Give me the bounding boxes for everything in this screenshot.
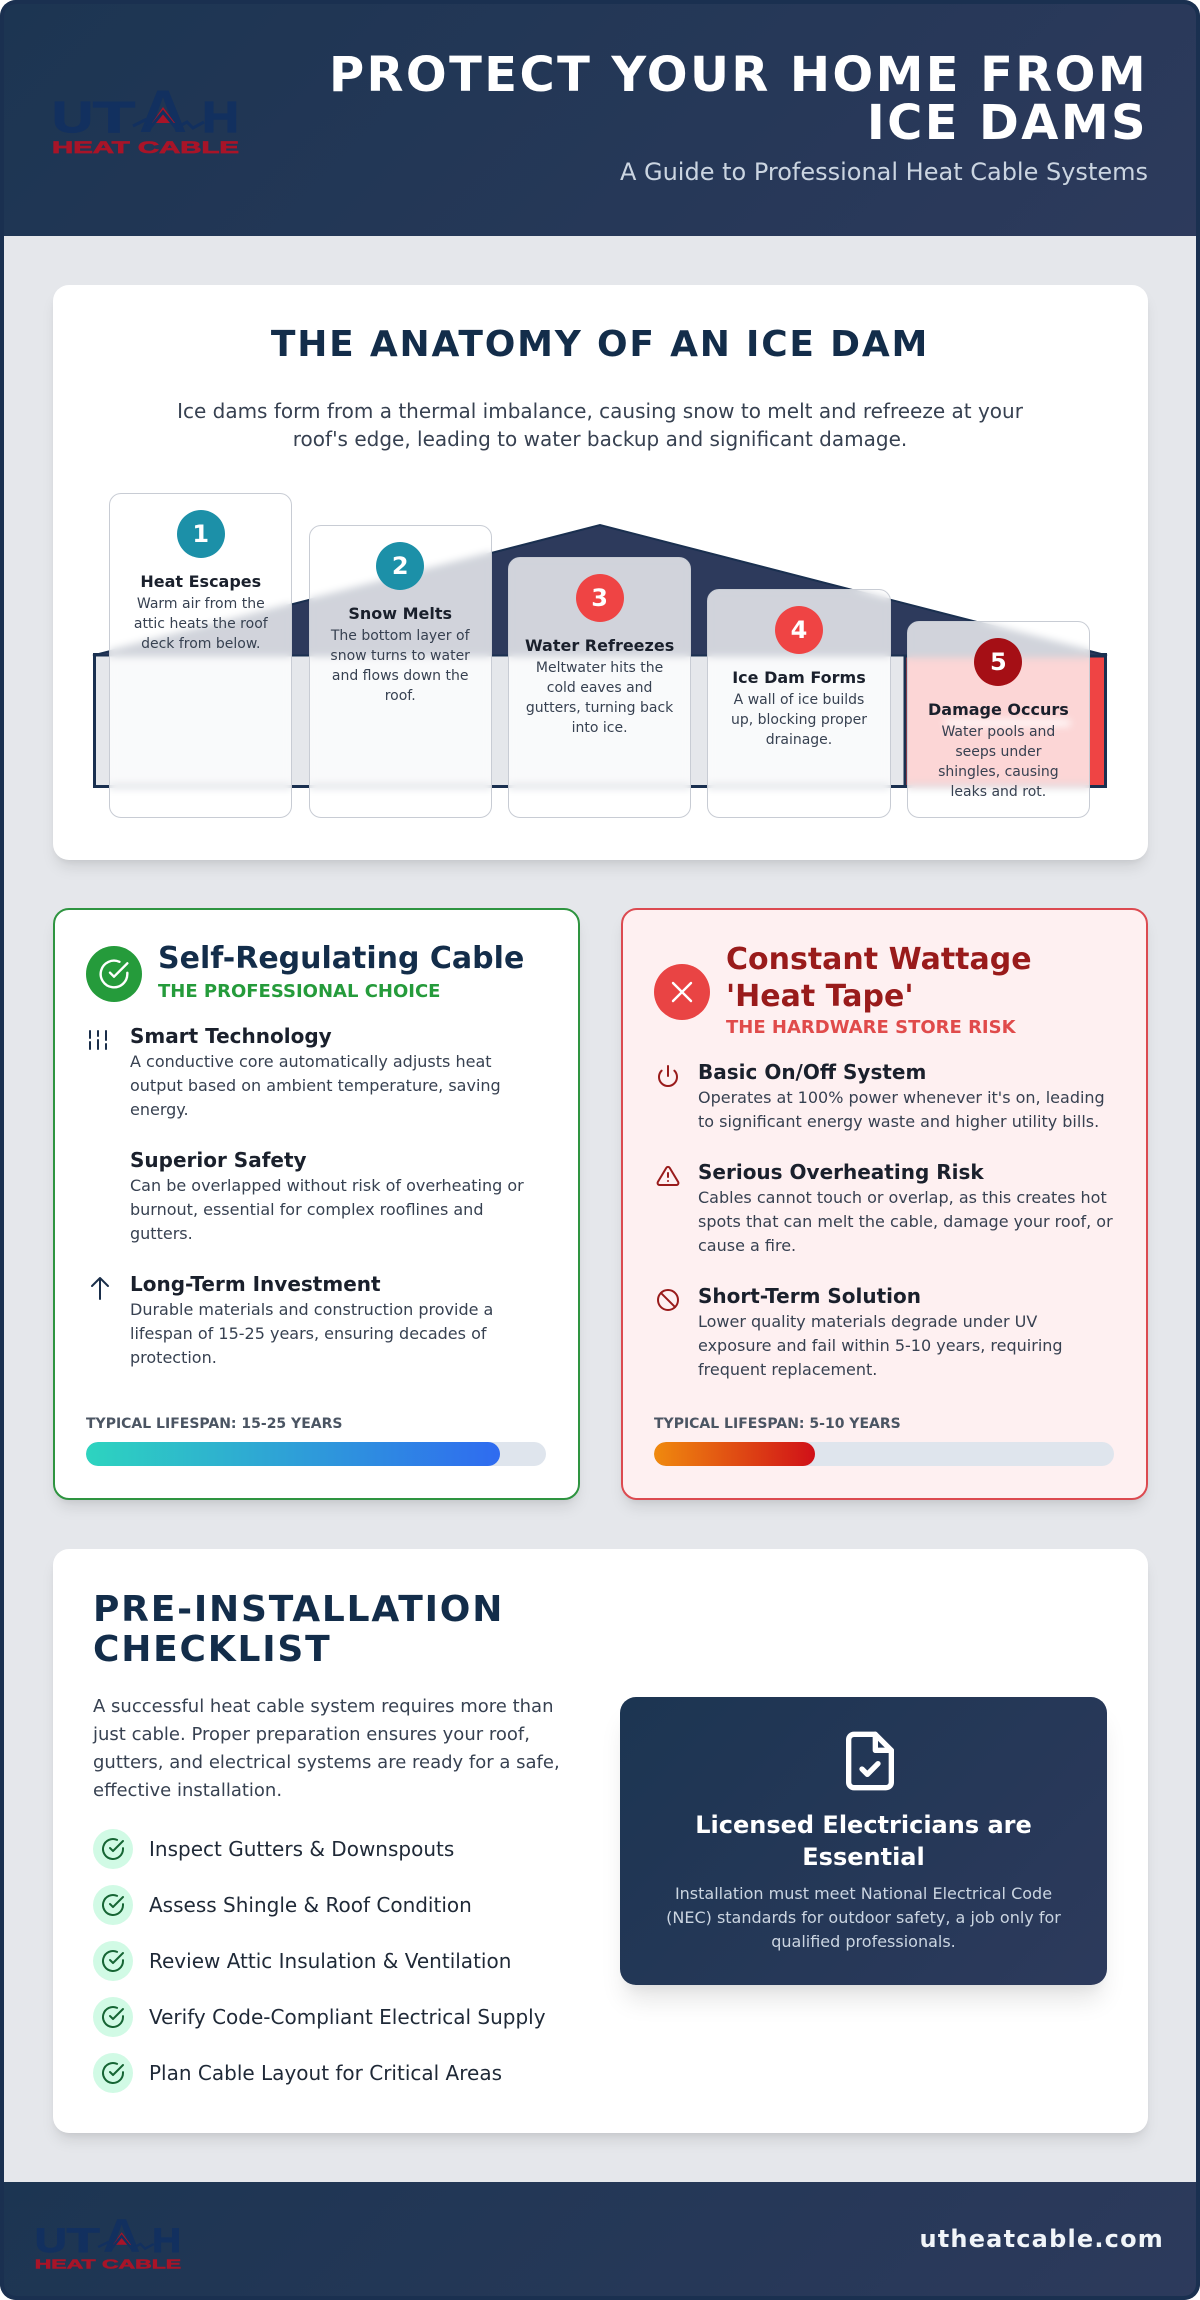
step title: Snow Melts [348, 604, 452, 623]
step 5 [907, 621, 1090, 818]
panel: self-regulating cable [52, 908, 580, 1500]
label: lifespan 5-10: TYPICAL LIFESPAN: 5-10 YEARS [654, 1416, 901, 1432]
bar: lifespan 5-10 [654, 1442, 1114, 1466]
step text [134, 596, 268, 652]
logo: Utah Heat Cable: U [52, 93, 93, 142]
callout text: (NEC) standards for outdoor safety, a job only for [666, 1908, 1061, 1926]
header band [0, 0, 1200, 236]
logo: Utah Heat Cable: H [202, 93, 239, 142]
step text: A wall of ice builds [734, 692, 864, 708]
feature: overheating risk: Serious Overheating Risk [698, 1160, 984, 1184]
panel: constant wattage heat tape [620, 908, 1148, 1500]
feature: smart technology: A conductive core automatically adjusts heat [130, 1052, 492, 1071]
feature: long-term investment: Long-Term Investment [130, 1272, 381, 1296]
feature: basic on/off: Basic On/Off System [698, 1060, 926, 1084]
heading: checklist: CHECKLIST [93, 1628, 331, 1670]
heading: checklist: PRE-INSTALLATION [93, 1588, 504, 1630]
step text: gutters, turning back [526, 700, 673, 716]
intro text: checklist: gutters, and electrical systems are ready for a safe, [93, 1752, 560, 1773]
number 4: 4 [791, 616, 807, 644]
intro text: checklist: A successful heat cable system requires more than [93, 1696, 554, 1717]
feature: short-term solution: Lower quality materials degrade under UV [698, 1312, 1037, 1331]
number 2 [376, 542, 424, 590]
step 4 [707, 589, 891, 818]
feature: overheating risk: spots that can melt the cable, damage your roof, or [698, 1212, 1113, 1231]
step text: and flows down the [332, 668, 468, 684]
heading: constant wattage: 'Heat Tape' [726, 979, 914, 1014]
feature: smart technology: Smart Technology [130, 1024, 332, 1048]
step text: leaks and rot. [951, 784, 1046, 800]
feature: long-term investment: Durable materials and construction provide a [130, 1300, 493, 1319]
label: lifespan 15-25: TYPICAL LIFESPAN: 15-25 YEARS [86, 1416, 342, 1432]
number 3: 3 [591, 584, 608, 612]
callout text [666, 1884, 1061, 1950]
callout text: Installation must meet National Electrical Code [675, 1884, 1052, 1902]
step text: up, blocking proper [731, 712, 867, 728]
feature: basic on/off: Operates at 100% power whenever it's on, leading [698, 1088, 1105, 1107]
step title: Water Refreezes [525, 636, 674, 655]
heading: constant wattage [726, 942, 1032, 1014]
checklist item 2: Assess Shingle & Roof Condition [149, 1893, 472, 1917]
step text [330, 628, 470, 704]
check icon 1 [93, 1829, 133, 1869]
icon: red cross [654, 964, 710, 1020]
number 4 [775, 606, 823, 654]
intro text: checklist: just cable. Proper preparation ensures your roof, [93, 1724, 530, 1745]
logo: Utah Heat Cable [52, 85, 239, 157]
main title [329, 47, 1148, 151]
feature: overheating risk [698, 1160, 1113, 1255]
intro text: checklist [92, 1696, 560, 1801]
feature: overheating risk: cause a fire. [698, 1236, 796, 1255]
checklist item 4: Verify Code-Compliant Electrical Supply [149, 2005, 546, 2029]
step title: Heat Escapes [140, 572, 261, 591]
icon: prohibited [657, 1289, 679, 1311]
footer logo: HEAT CABLE [34, 2256, 181, 2271]
feature: smart technology: energy. [130, 1100, 189, 1119]
subheading: professional choice: THE PROFESSIONAL CHOICE [158, 981, 440, 1002]
checklist item 5: Plan Cable Layout for Critical Areas [149, 2061, 502, 2085]
number 2: 2 [392, 552, 409, 580]
panel: anatomy of an ice dam [53, 285, 1148, 860]
step title: Ice Dam Forms [732, 668, 866, 687]
footer logo [34, 2215, 181, 2271]
footer logo: T [66, 2221, 99, 2259]
number 5 [974, 638, 1022, 686]
heading: self-regulating cable: Self-Regulating Cable [158, 941, 524, 976]
footer logo: U [34, 2221, 66, 2259]
feature: superior safety: gutters. [130, 1224, 193, 1243]
step text: drainage. [766, 732, 832, 748]
icon: power [658, 1065, 678, 1087]
check icon 3 [93, 1941, 133, 1981]
feature: smart technology: output based on ambient temperature, saving [130, 1076, 501, 1095]
callout text: qualified professionals. [771, 1932, 956, 1950]
main title: PROTECT YOUR HOME FROM [329, 47, 1148, 103]
feature: superior safety: Can be overlapped without risk of overheating or [130, 1176, 524, 1195]
intro text: anatomy: Ice dams form from a thermal imbalance, causing snow to melt and refreeze at your [177, 399, 1023, 423]
step text: into ice. [572, 720, 628, 736]
feature: short-term solution: Short-Term Solution [698, 1284, 921, 1308]
feature: smart technology [130, 1024, 501, 1119]
icon: green check [86, 946, 142, 1002]
subheading: hardware store risk: THE HARDWARE STORE RISK [726, 1017, 1016, 1038]
panel: pre-installation checklist [53, 1549, 1148, 2133]
heading: anatomy: THE ANATOMY OF AN ICE DAM [271, 324, 929, 364]
step text: snow turns to water [330, 648, 470, 664]
footer band [0, 2182, 1200, 2300]
intro text: anatomy: roof's edge, leading to water backup and significant damage. [293, 427, 907, 451]
feature: short-term solution [698, 1284, 1063, 1379]
bar: lifespan 15-25 [86, 1442, 546, 1466]
step 1 [109, 493, 292, 818]
number 1 [177, 510, 225, 558]
heading: constant wattage: Constant Wattage [726, 942, 1032, 977]
main title: ICE DAMS [867, 95, 1148, 151]
check icon 2 [93, 1885, 133, 1925]
icon: warning triangle [656, 1166, 680, 1186]
number 3 [576, 574, 624, 622]
subtitle: A Guide to Professional Heat Cable Systems [620, 158, 1148, 186]
footer logo: H [152, 2221, 181, 2259]
callout: licensed electricians [620, 1697, 1107, 1985]
step text: Meltwater hits the [536, 660, 663, 676]
step text: Warm air from the [137, 596, 265, 612]
step title: Damage Occurs [928, 700, 1069, 719]
feature: superior safety: burnout, essential for complex rooflines and [130, 1200, 483, 1219]
step 2 [309, 525, 492, 818]
house diagram [92, 524, 1108, 792]
logo: Utah Heat Cable: HEAT CABLE [52, 139, 239, 157]
step text: cold eaves and [547, 680, 652, 696]
feature: basic on/off: to significant energy waste and higher utility bills. [698, 1112, 1099, 1131]
number 1: 1 [192, 520, 209, 548]
feature: short-term solution: frequent replacement. [698, 1360, 877, 1379]
feature: long-term investment: lifespan of 15-25 years, ensuring decades of [130, 1324, 486, 1343]
icon: file check [846, 1732, 894, 1790]
step text: roof. [385, 688, 416, 704]
intro text: checklist: effective installation. [93, 1780, 282, 1801]
step text: attic heats the roof [134, 616, 268, 632]
callout heading: Essential [802, 1843, 925, 1871]
step text [526, 660, 674, 736]
step text: Water pools and [941, 724, 1055, 740]
check icon 4 [93, 1997, 133, 2037]
heading: checklist [93, 1588, 504, 1670]
step text: deck from below. [141, 636, 260, 652]
callout heading: Licensed Electricians are [695, 1811, 1032, 1839]
step text: shingles, causing [938, 764, 1059, 780]
feature: superior safety [130, 1148, 524, 1243]
step 3 [508, 557, 691, 818]
icon: arrow up [91, 1277, 109, 1300]
feature: short-term solution: exposure and fail within 5-10 years, requiring [698, 1336, 1063, 1355]
checklist item 3: Review Attic Insulation & Ventilation [149, 1949, 511, 1973]
feature: overheating risk: Cables cannot touch or overlap, as this creates hot [698, 1188, 1107, 1207]
feature: long-term investment: protection. [130, 1348, 217, 1367]
logo: Utah Heat Cable: T [93, 93, 135, 142]
feature: superior safety: Superior Safety [130, 1148, 307, 1172]
checklist item 1: Inspect Gutters & Downspouts [149, 1837, 454, 1861]
step text: The bottom layer of [331, 628, 470, 644]
number 5: 5 [990, 648, 1007, 676]
step text [731, 692, 867, 748]
callout heading [695, 1811, 1032, 1871]
icon: sliders [89, 1030, 107, 1050]
feature: long-term investment [130, 1272, 493, 1367]
website: utheatcable.com [919, 2225, 1164, 2253]
step text: seeps under [955, 744, 1041, 760]
step text [938, 724, 1059, 800]
feature: basic on/off [698, 1060, 1105, 1131]
check icon 5 [93, 2053, 133, 2093]
intro text: anatomy [177, 399, 1023, 451]
